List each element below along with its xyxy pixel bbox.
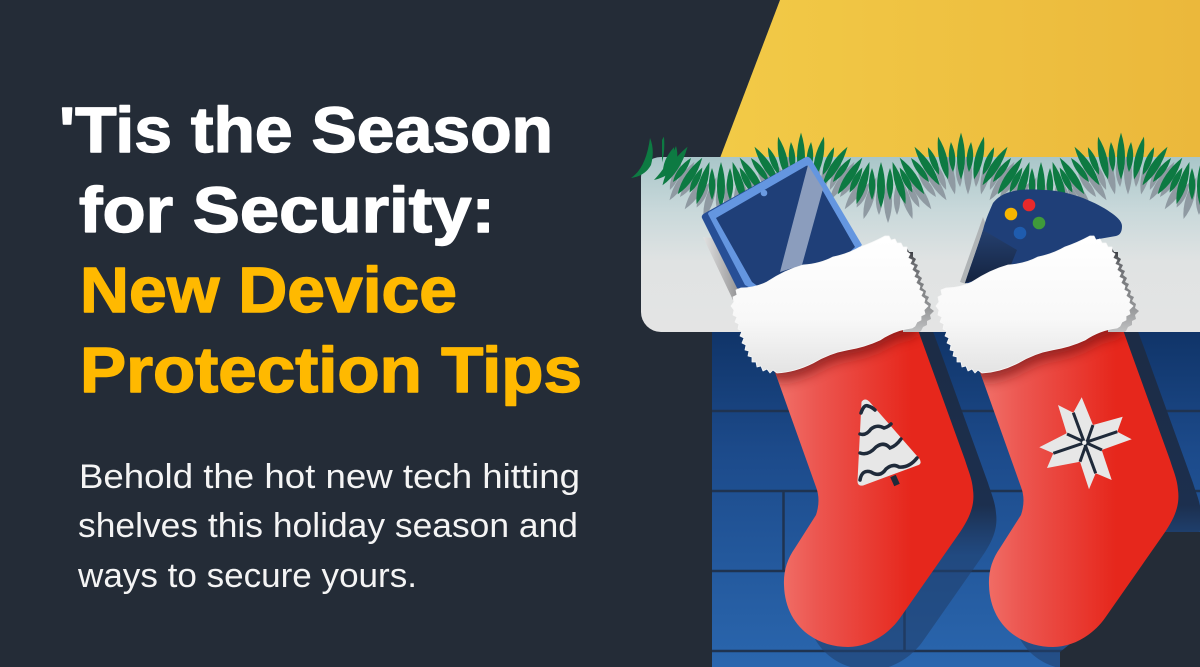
title: for Security: (79, 174, 495, 246)
intro text: shelves this holiday season and (78, 507, 578, 545)
dark floor area (1060, 532, 1200, 667)
yellow wall (720, 0, 1200, 158)
cuff right (936, 236, 1139, 378)
brick chimney (712, 331, 1200, 667)
intro text: ways to secure yours. (77, 557, 417, 595)
garland (631, 132, 1200, 208)
stocking right (980, 330, 1178, 647)
icon: smartphone (702, 157, 862, 310)
icon: game controller (960, 189, 1122, 290)
title: Protection Tips (80, 334, 582, 406)
stocking shadows (815, 332, 1200, 667)
stocking left (774, 330, 974, 647)
title: 'Tis the Season (59, 94, 553, 166)
icon: christmas tree (858, 400, 920, 485)
title (59, 94, 582, 406)
title: New Device (80, 254, 457, 326)
icon: snowflake (1039, 397, 1132, 489)
mantel (641, 157, 1200, 332)
garland shadow (670, 157, 1200, 223)
intro text (77, 458, 580, 595)
intro text: Behold the hot new tech hitting (79, 458, 580, 496)
cuff left (731, 236, 934, 378)
